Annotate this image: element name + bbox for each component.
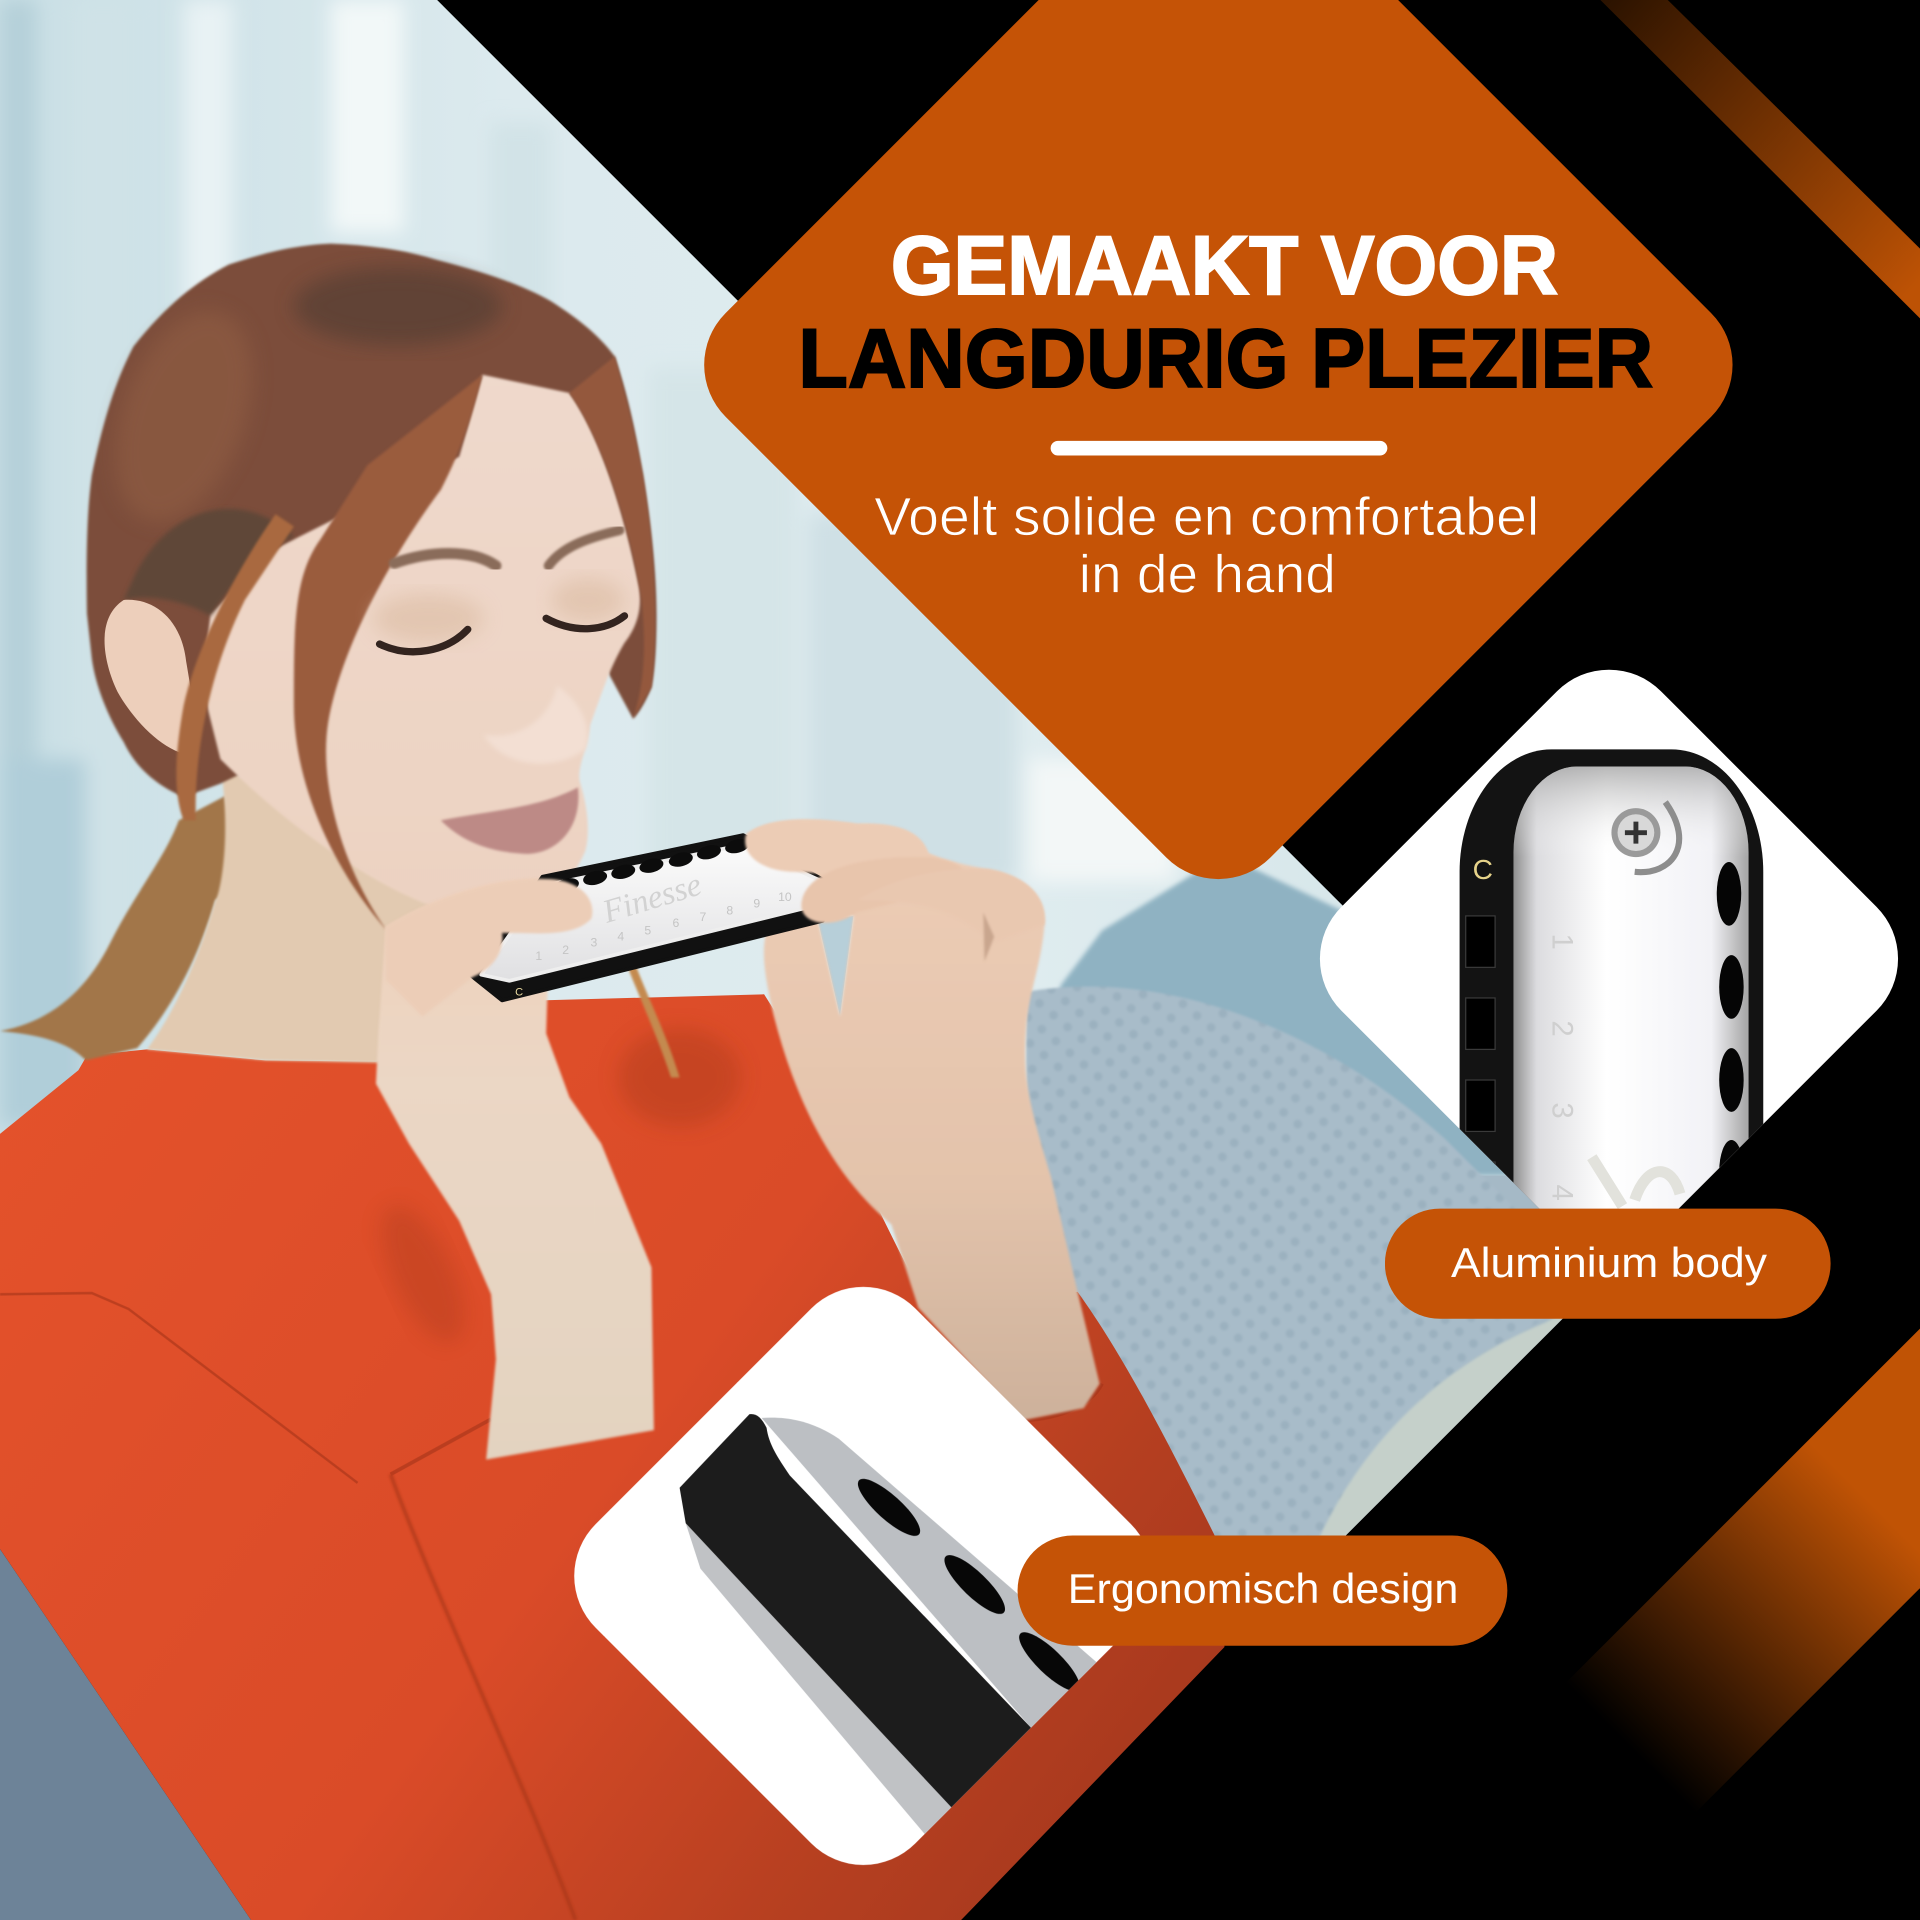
panel: aluminium body close-up [1289,639,1920,1435]
eyes: closed lashes [380,616,624,652]
neck [146,775,428,1064]
harmonica close-up, front view: 4 [1546,1184,1579,1201]
orange diamond [674,0,1763,910]
accent stripe: bottom right [1329,1329,1920,1920]
label pill: aluminium body: Aluminium body [1451,1239,1767,1286]
accent stripe: top right [1600,0,1920,318]
shirt folds [0,1293,1102,1920]
sofa seat edge [1320,1318,1563,1536]
harmonica in hands [471,835,827,1000]
ear [105,600,195,756]
left hand fingers over harmonica [386,879,592,1016]
photo background: curtains [0,0,1714,1347]
subtitle: Voelt solide en comfortabel [874,487,1539,547]
harmonica hole numbers: 2 [562,943,569,957]
harmonica hole numbers: 4 [617,929,624,943]
hair: warm highlight [88,292,279,541]
eyebrows [394,530,620,566]
white diamond [1289,639,1920,1278]
white diamond [544,1256,1183,1895]
background gap between the fingers [818,916,853,1016]
sofa backrest [1058,868,1506,1176]
cushion [1025,986,1514,1536]
harmonica close-up, front view [1460,749,1763,1435]
harmonica key mark: C [515,987,523,999]
label pill: aluminium body [1385,1209,1831,1319]
hair: fringe strands [176,356,680,1078]
harmonica hole numbers: 9 [753,896,760,910]
hair: back [87,244,656,797]
harmonica hole numbers: 10 [778,890,792,904]
shirt shadow near collar [618,1029,741,1127]
hair: side area above ear [124,509,294,616]
hair: dark crown [294,267,502,345]
harmonica close-up, front view: 3 [1546,1102,1579,1119]
harmonica hole numbers [535,890,792,963]
subtitle: in de hand [1079,545,1336,605]
harmonica hole numbers: 7 [699,910,706,924]
divider bar [1051,441,1387,456]
right eye shadow [551,578,624,622]
red shirt [0,994,1224,1920]
eye shadows [373,594,484,643]
sofa base behind cushion [1346,1176,1563,1536]
face [202,375,640,921]
harmonica close-up, front view: 1 [1546,933,1579,950]
right hand fingers over harmonica [745,820,1045,961]
ponytail [0,796,231,1060]
label pill: ergonomic design: Ergonomisch design [1068,1565,1458,1612]
harmonica mouth holes [553,837,751,895]
panel: ergonomic design close-up [544,1256,1183,1895]
harmonica body [471,835,827,1000]
harmonica hole numbers: 3 [590,936,597,950]
panel: orange diamond with headline [674,0,1763,910]
right hand and forearm [746,820,1100,1420]
harmonica hole numbers: 8 [726,904,733,918]
lips [441,787,578,854]
title line 2: LANGDURIG PLEZIER [798,312,1653,405]
harmonica hole numbers: 5 [644,923,651,937]
harmonica brand: Finesse [598,867,706,931]
shirt shadow [380,1206,465,1341]
harmonica cover plate [481,845,823,981]
harmonica close-up, front view: C [1473,854,1493,885]
title line 1: GEMAAKT VOOR [891,219,1558,312]
label pill: ergonomic design [1018,1536,1507,1646]
sofa lower left [0,1549,251,1920]
harmonica close-up, front view: 2 [1546,1020,1579,1037]
nose highlight and shadow [484,686,587,764]
harmonica hole numbers: 6 [673,916,680,930]
subtitle [874,487,1539,605]
harmonica close-up, end view [680,1414,1114,1837]
harmonica hole numbers: 1 [535,949,542,963]
left hand and forearm [376,879,654,1460]
